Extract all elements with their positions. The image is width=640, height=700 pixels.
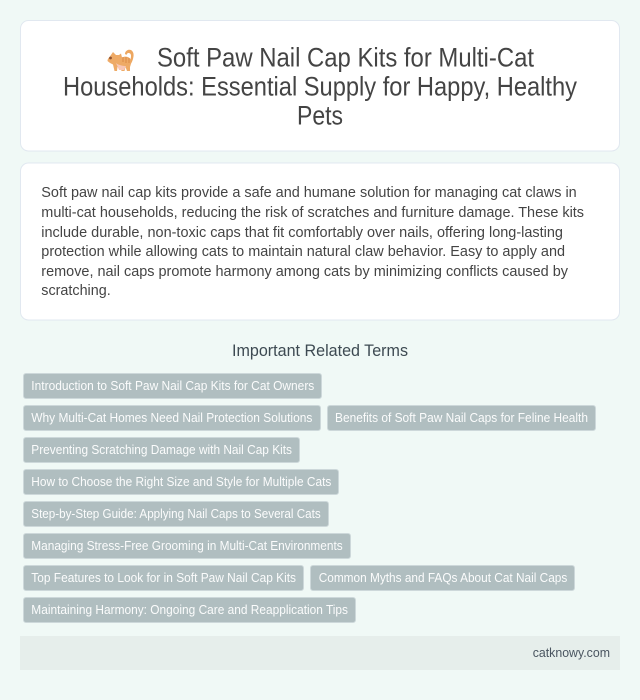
icon: orange cat bbox=[108, 50, 134, 71]
text block: description paragraph: protection while allowing cats to maintain natural claw behavior. Easy to apply and bbox=[41, 243, 565, 260]
tag: introduction: Introduction to Soft Paw Nail Cap Kits for Cat Owners bbox=[31, 378, 315, 393]
tag: myths and FAQs bbox=[310, 566, 574, 590]
text block: description paragraph: include durable, non-toxic caps that fit comfortably over nails, offering long-lasting bbox=[41, 224, 563, 241]
text block: description paragraph bbox=[41, 184, 584, 299]
heading: title text: Households: Essential Supply for Happy, Healthy bbox=[63, 72, 578, 102]
tag: stress-free grooming bbox=[24, 534, 350, 558]
heading: important related terms: Important Related Terms bbox=[232, 342, 408, 360]
tag: step-by-step bbox=[24, 502, 328, 526]
tag: preventing scratching bbox=[24, 438, 300, 462]
tag: benefits bbox=[328, 406, 596, 430]
tag: choosing size: How to Choose the Right Size and Style for Multiple Cats bbox=[31, 474, 332, 489]
heading: title text bbox=[63, 42, 578, 130]
tag: why multi-cat homes: Why Multi-Cat Homes Need Nail Protection Solutions bbox=[31, 410, 313, 425]
heading: title text: Pets bbox=[297, 100, 343, 130]
tag: step-by-step: Step-by-Step Guide: Applying Nail Caps to Several Cats bbox=[31, 506, 321, 521]
text block: description paragraph: scratching. bbox=[41, 282, 111, 299]
tag: myths and FAQs: Common Myths and FAQs About Cat Nail Caps bbox=[319, 570, 568, 585]
tag: top features: Top Features to Look for in Soft Paw Nail Cap Kits bbox=[31, 570, 296, 585]
tag: choosing size bbox=[24, 470, 338, 494]
text block: description paragraph: Soft paw nail cap kits provide a safe and humane solution for managing cat claws in bbox=[41, 184, 577, 201]
text block: description paragraph: remove, nail caps promote harmony among cats by minimizing conflicts caused by bbox=[41, 263, 568, 280]
text block: description paragraph: multi-cat households, reducing the risk of scratches and furniture damage. These kits bbox=[41, 204, 584, 221]
tag: why multi-cat homes bbox=[24, 406, 320, 430]
heading: title text: Soft Paw Nail Cap Kits for Multi-Cat bbox=[157, 42, 535, 72]
footer bbox=[20, 636, 620, 670]
panel: title card bbox=[20, 20, 620, 151]
tag: preventing scratching: Preventing Scratching Damage with Nail Cap Kits bbox=[31, 442, 292, 457]
tag: top features bbox=[24, 566, 304, 590]
tag: stress-free grooming: Managing Stress-Free Grooming in Multi-Cat Environments bbox=[31, 538, 343, 553]
tag: introduction bbox=[24, 374, 322, 398]
tag: benefits: Benefits of Soft Paw Nail Caps for Feline Health bbox=[335, 410, 588, 425]
tag: maintaining harmony bbox=[24, 598, 356, 622]
tag: maintaining harmony: Maintaining Harmony: Ongoing Care and Reapplication Tips bbox=[31, 602, 348, 617]
footer: catknowy.com bbox=[533, 645, 610, 660]
panel: description bbox=[20, 163, 620, 320]
